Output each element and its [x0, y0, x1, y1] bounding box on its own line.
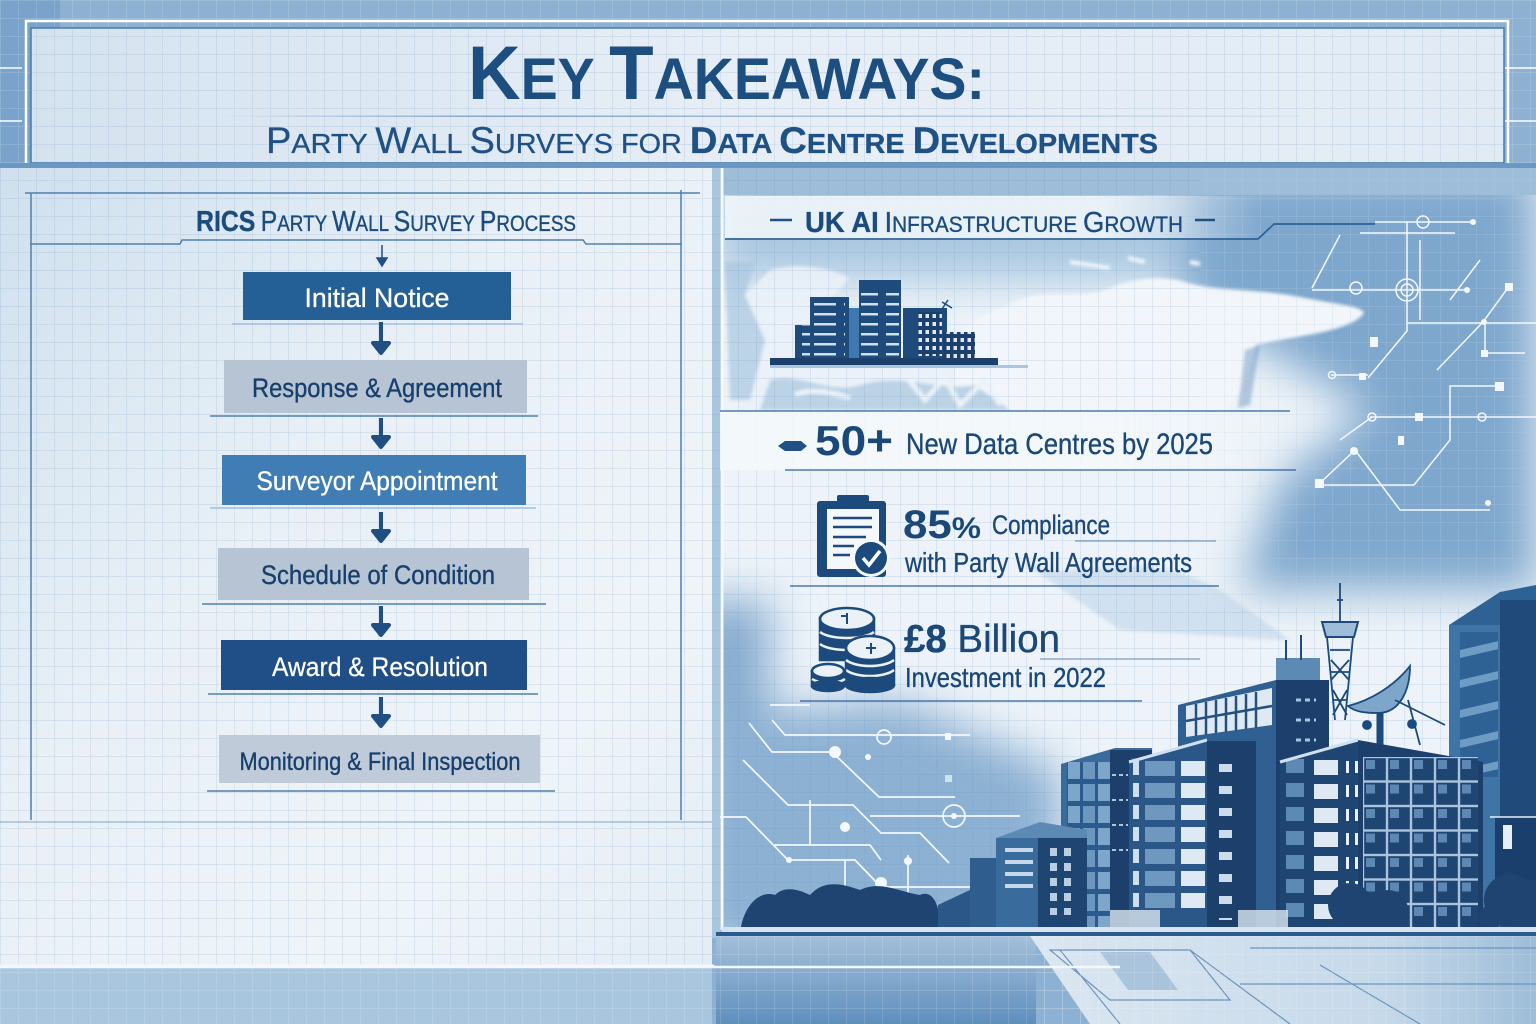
icon: marker: [778, 441, 807, 451]
building: low left: [970, 822, 1087, 927]
arrow: step 4 to 5: [373, 606, 389, 635]
step: response and agreement: Response & Agreement: [252, 373, 502, 403]
stat label: New Data Centres by 2025: [906, 428, 1213, 461]
section heading: growth: [725, 196, 1375, 240]
ground line: [722, 927, 1536, 932]
icon: clipboard with check: [817, 495, 890, 577]
building: far right tower: [1449, 585, 1536, 927]
trees: [741, 874, 1536, 934]
section heading: growth: UK AI INFRASTRUCTURE GROWTH: [805, 207, 1183, 239]
step: initial notice: [232, 272, 523, 324]
arrow: step 3 to 4: [373, 512, 389, 541]
stat: investment: Investment in 2022: [905, 662, 1106, 693]
subtitle: PARTY WALL SURVEYS FOR DATA CENTRE DEVELOPMENTS: [266, 120, 1158, 161]
step: surveyor appointment: [210, 455, 536, 508]
circuit: lower left: [720, 705, 1020, 895]
icon: coin stacks: [812, 608, 894, 692]
arrow: step 2 to 3: [373, 418, 389, 447]
step: award and resolution: [208, 640, 538, 694]
stat: compliance: [790, 503, 1219, 586]
building: narrow left: [1061, 748, 1152, 927]
step: monitoring and final inspection: Monitoring & Final Inspection: [240, 748, 520, 776]
map land: [945, 278, 1364, 411]
tower and dish: [1322, 583, 1445, 745]
icon: city skyline: [770, 280, 1028, 368]
illustration: data centre buildings: [722, 583, 1536, 934]
stat: investment: £8 Billion: [904, 618, 1060, 661]
stat: compliance: with Party Wall Agreements: [904, 547, 1192, 578]
arrow: step 1 to 2: [373, 322, 389, 353]
step: initial notice: Initial Notice: [304, 283, 450, 313]
step: monitoring and final inspection: [207, 735, 555, 791]
panel: process: [0, 168, 714, 968]
arrow: to initial notice: [377, 245, 387, 266]
panel: growth background: [690, 168, 1536, 950]
title: KEY TAKEAWAYS:: [468, 31, 985, 116]
step: response and agreement: [210, 360, 538, 416]
stat: compliance: Compliance: [992, 510, 1110, 540]
stat: compliance: 85%: [903, 503, 981, 547]
step: schedule of condition: [202, 548, 546, 604]
panel heading: RICS PARTY WALL SURVEY PROCESS: [196, 206, 576, 238]
building: front middle: [1110, 740, 1256, 927]
arrow: step 5 to 6: [373, 697, 389, 726]
panel: ground plaza: [0, 932, 1536, 1024]
step: schedule of condition: Schedule of Condition: [261, 560, 495, 590]
building: front right: [1238, 740, 1483, 927]
panel: header: [0, 21, 1536, 168]
stat value: 50+: [815, 417, 893, 464]
building: central back: [1178, 635, 1329, 927]
stat: data centres: [720, 411, 1296, 470]
step: surveyor appointment: Surveyor Appointment: [256, 466, 498, 496]
stat: investment: [800, 618, 1200, 701]
circuit: upper right: [1312, 216, 1536, 510]
step: award and resolution: Award & Resolution: [272, 652, 488, 682]
